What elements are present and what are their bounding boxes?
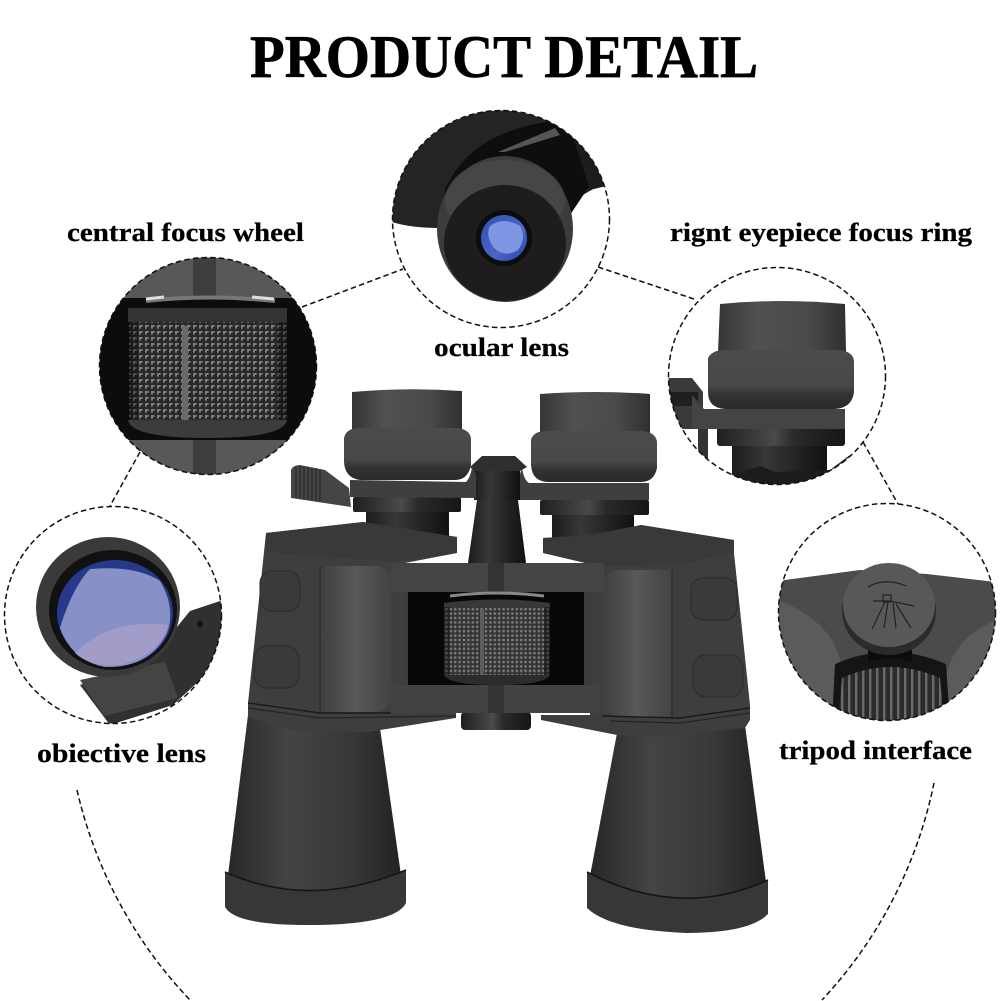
inset outline: tripod interface — [778, 504, 996, 720]
label: right eyepiece focus ring: rignt eyepiece focus ring — [670, 218, 972, 247]
title: PRODUCT DETAIL — [250, 24, 758, 90]
inset: central focus wheel — [99, 257, 317, 475]
left body — [248, 522, 457, 732]
inset outline: objective lens — [4, 506, 222, 724]
inset outline: ocular lens — [392, 110, 610, 328]
inset: tripod interface — [778, 563, 996, 722]
right eyepiece tube — [540, 500, 649, 545]
lower tripod knob — [461, 712, 531, 730]
bridge dark interior — [391, 592, 602, 685]
right objective barrel — [587, 725, 768, 933]
left eyecup — [344, 389, 471, 480]
icon: tripod symbol — [868, 582, 914, 629]
connector lines and large arcs — [77, 267, 934, 1000]
left objective barrel — [225, 715, 406, 925]
right eyecup — [531, 392, 657, 482]
label: tripod interface: tripod interface — [779, 736, 972, 765]
inset outline: central focus wheel — [100, 258, 316, 474]
label: objective lens: obiective lens — [37, 739, 206, 768]
main binoculars — [225, 389, 768, 933]
inset: ocular lens — [392, 110, 610, 302]
focus wheel — [444, 593, 550, 685]
left eyepiece tube — [353, 497, 461, 542]
inset outline: right eyepiece focus ring — [668, 268, 886, 484]
bridge bars — [391, 563, 604, 713]
inset: right eyepiece focus ring — [668, 301, 860, 486]
right body — [541, 525, 750, 737]
inset: objective lens — [36, 537, 223, 725]
focus lever — [291, 465, 351, 507]
eyepiece bridge arms — [350, 468, 649, 500]
label: central focus wheel: central focus wheel — [67, 218, 304, 247]
label: ocular lens: ocular lens — [434, 333, 569, 362]
central post — [468, 456, 527, 563]
